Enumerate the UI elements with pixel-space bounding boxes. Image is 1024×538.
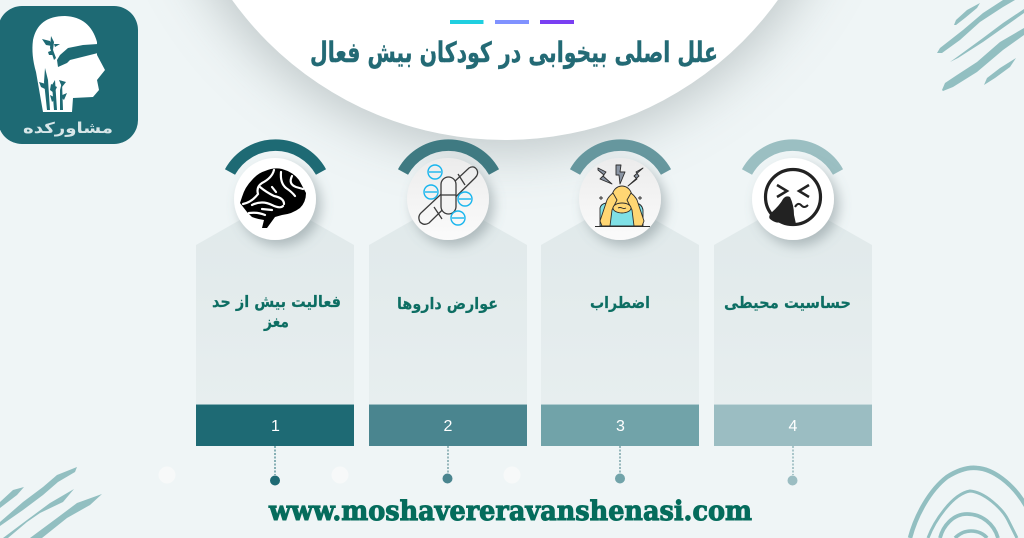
- icon: anxious person: [595, 165, 650, 226]
- circle: [407, 158, 489, 240]
- number bar: [369, 404, 527, 446]
- card body: [196, 200, 354, 404]
- number: 4: [789, 418, 798, 435]
- arc: [403, 145, 494, 172]
- circle: [234, 158, 316, 240]
- logo hand and plants: [39, 36, 98, 110]
- number: 3: [616, 418, 625, 435]
- circle: [579, 158, 661, 240]
- icon: brain: [240, 168, 306, 228]
- icon: sneezing face: [766, 170, 820, 225]
- icon: pills: [419, 165, 478, 225]
- panel 2: medication side effects: [369, 145, 527, 446]
- logo head silhouette: [32, 16, 105, 112]
- heading: حساسیت محیطی: [724, 293, 851, 312]
- decoration: top right brush strokes: [937, 0, 1024, 91]
- title accent bars: [450, 20, 574, 24]
- white header shape: [169, 0, 841, 140]
- website url: www.moshavereravanshenasi.com: [268, 496, 752, 527]
- decorative pale dots: [158, 466, 520, 484]
- circle: [752, 158, 834, 240]
- logo wordmark: مشاورکده: [23, 119, 113, 137]
- panel 4: environmental sensitivity: [714, 145, 872, 446]
- number bar: [714, 404, 872, 446]
- panel 1: brain overactivity: [196, 145, 354, 446]
- connector 2: [442, 446, 452, 484]
- top header shape shadow: [160, 0, 850, 149]
- number bar: [541, 404, 699, 446]
- heading: عوارض داروها: [397, 294, 498, 313]
- arc: [747, 145, 838, 172]
- card body: [714, 200, 872, 404]
- heading: فعالیت بیش از حد: [212, 292, 341, 311]
- panel 3: anxiety: [541, 145, 699, 446]
- connector 3: [615, 446, 625, 484]
- connector 1: [270, 446, 280, 486]
- number: 2: [444, 418, 453, 435]
- connector 4: [788, 446, 798, 486]
- arc: [230, 145, 321, 172]
- title: علل اصلی بیخوابی در کودکان بیش فعال: [310, 36, 718, 69]
- heading: مغز: [263, 312, 289, 331]
- card body: [369, 200, 527, 404]
- card body: [541, 200, 699, 404]
- decoration: bottom left brush strokes: [0, 467, 102, 538]
- number: 1: [271, 418, 280, 435]
- number bar: [196, 404, 354, 446]
- decoration: bottom right concentric arcs: [910, 468, 1024, 538]
- heading: اضطراب: [590, 293, 650, 312]
- logo: [0, 6, 138, 144]
- arc: [575, 145, 666, 172]
- heading: [212, 292, 341, 331]
